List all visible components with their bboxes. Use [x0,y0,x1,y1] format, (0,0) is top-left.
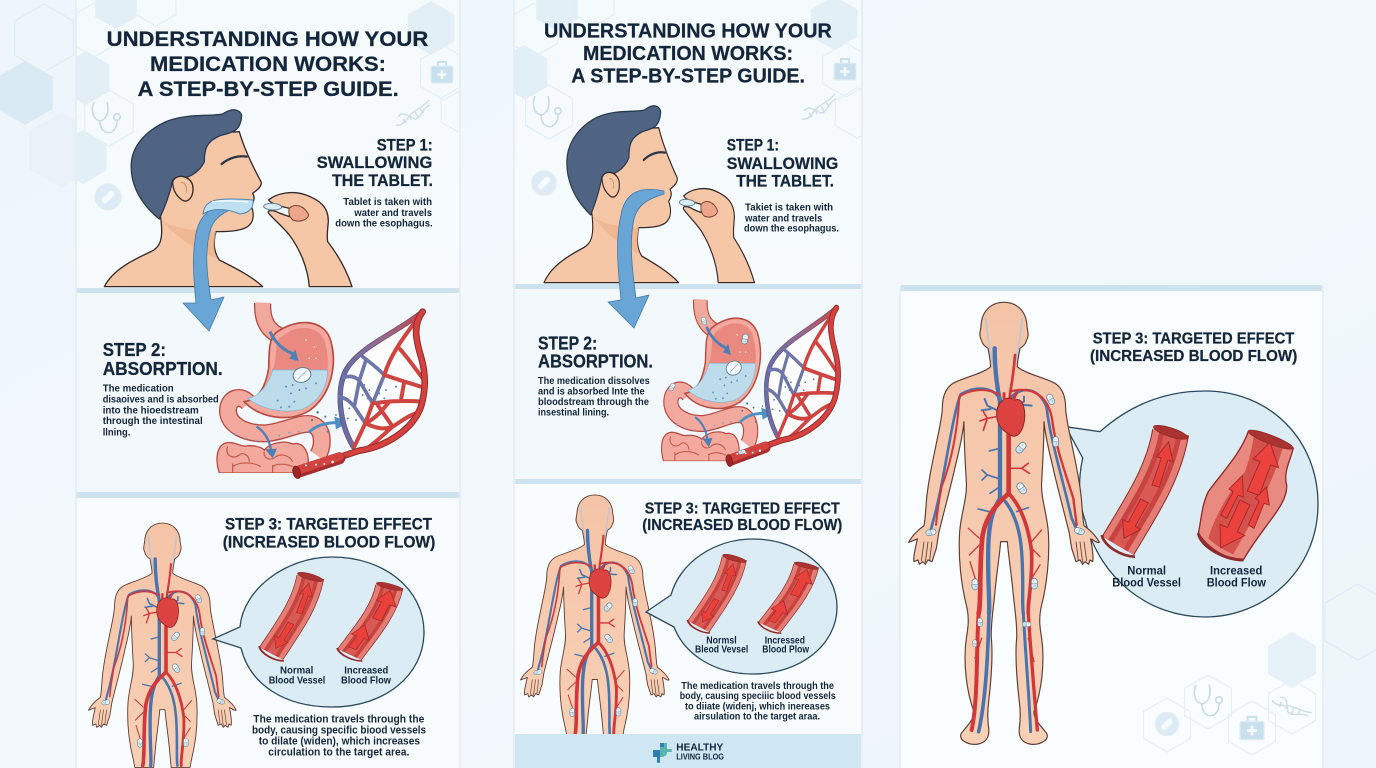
step two text: and is absorbed Inte the [538,385,645,397]
vessel labels: Normal [1127,563,1166,577]
step three text [252,713,426,759]
title: UNDERSTANDING HOW YOUR [544,20,832,42]
step one heading: THE TABLET. [332,171,433,190]
step two background [515,289,861,479]
step one text: down the esophagus. [744,223,839,235]
arrow: esophagus down to step two [608,189,664,328]
vessel labels [269,664,392,686]
illustration: body with blood vessels [520,495,669,737]
vessel labels: Normsl [706,634,737,646]
normal vessel [259,570,324,661]
vessel labels: Normal [280,664,313,676]
step three text: to dilate (widen), which increases [259,735,420,747]
logo text [676,742,724,761]
illustration: man taking tablet [104,110,352,287]
panel: version two infographic [501,0,879,768]
step three heading: (INCREASED BLOOD FLOW) [223,533,435,551]
step two heading [538,333,653,372]
step one text: Takiet is taken with [745,202,833,214]
vessel labels: Incressed [765,634,805,646]
step two text: The medication [103,383,174,395]
step one text: down the esophagus. [335,218,433,230]
step one text: water and travels [353,207,432,219]
title: MEDICATION WORKS: [583,43,793,65]
section band [515,284,861,289]
step two heading: STEP 2: [103,339,166,360]
step two heading: STEP 2: [538,333,597,353]
step three heading: STEP 3: TARGETED EFFECT [225,516,432,534]
step one text: water and travels [744,212,822,224]
vessel labels: Blood Flow [1207,576,1267,590]
step two text [103,383,219,438]
step one heading: STEP 1: [377,136,433,155]
step one heading: STEP 1: [727,136,779,155]
title: A STEP-BY-STEP GUIDE. [571,65,805,87]
title [107,28,428,101]
step three text: body, causing speciiic blood vessels [680,690,836,702]
section band [515,479,861,484]
vessel labels [1112,563,1267,590]
logo text: HEALTHY [676,742,723,754]
step one heading: SWALLOWING [317,153,432,172]
panel three hexagon pattern and medical icons [1144,632,1316,755]
step three text [680,680,836,722]
top band [901,285,1322,291]
vessel labels: Blood Flow [341,674,392,686]
step one heading [727,136,838,190]
step one heading: THE TABLET. [736,171,834,190]
callout: vessel comparison [213,557,424,707]
step one text: Tablet is taken with [343,196,432,208]
step one text [335,196,433,230]
step three heading [642,500,842,534]
vessel labels: Bleod Vevsel [695,644,748,656]
step three heading [1090,330,1297,365]
vessel labels: Blood Plow [762,644,810,656]
illustration: stomach and capillaries [217,303,425,479]
vessel labels: Increased [1210,563,1262,577]
vessel labels: Blood Vessel [1112,576,1181,590]
step three heading: STEP 3: TARGETED EFFECT [645,500,840,517]
illustration: man taking tablet [544,106,754,283]
step three heading: (INCREASED BLOOD FLOW) [1090,348,1297,365]
icon: medical cross [653,743,672,763]
panel: version one infographic [60,0,483,768]
step three text: The medication travels through the [253,713,424,725]
section band [77,492,459,498]
increased vessel [758,560,819,633]
step three background [515,484,861,734]
step three heading: (INCREASED BLOOD FLOW) [642,517,842,534]
title: A STEP-BY-STEP GUIDE. [138,78,399,101]
step three text: airsulation to the target araa. [694,710,820,722]
step two text: through the intestinal [103,415,203,427]
panel two hexagon pattern and medical icons [501,0,879,195]
normal vessel [1102,423,1189,557]
step two heading: ABSORPTION. [103,358,223,379]
illustration: body with blood vessels [909,302,1099,744]
step three text: The medication travels through the [681,680,834,692]
step three text: body, causing specific biood vessels [252,724,426,736]
step one heading [317,136,433,190]
arrow: esophagus down to step two [183,206,238,331]
step three background [77,498,459,768]
capsules in esophagus and stomach [668,317,749,455]
step three text: to diiate (widenj, which inereases [685,700,830,712]
title: UNDERSTANDING HOW YOUR [107,28,428,51]
callout: vessel comparison [646,539,837,674]
step two text: llning. [103,426,130,438]
logo text: LIVING BLOG [676,752,724,761]
step three text: circulation to the target area. [268,747,409,759]
step two text [538,375,650,419]
step one heading: SWALLOWING [727,154,838,173]
illustration: body with blood vessels [89,523,236,767]
logo [653,742,724,763]
panel: enlarged step three [899,285,1324,768]
panel one hexagon pattern and medical icons [60,0,483,764]
water in mouth [203,199,253,214]
normal vessel [687,553,747,633]
step three heading: STEP 3: TARGETED EFFECT [1093,330,1295,347]
increased vessel [337,581,403,661]
vessel labels: Blood Vessel [269,674,325,686]
step two text: bloodstream through the [538,396,649,408]
illustration: stomach and capillaries [662,299,838,467]
step two background [77,293,459,492]
title: MEDICATION WORKS: [150,53,386,76]
vessel labels [695,634,810,656]
step one text [744,202,839,235]
title [544,20,832,87]
step two text: disaoives and is absorbed [103,394,219,406]
step two text: insestinal lining. [538,407,609,419]
callout: vessel comparison [1066,391,1318,617]
vessel labels: Increased [344,664,388,676]
step two heading: ABSORPTION. [538,352,653,372]
step two text: The medication dissolves [538,375,650,387]
section band [77,288,459,293]
step three heading [223,516,435,551]
step two text: into the hioedstream [103,404,199,416]
increased vessel [1198,427,1295,560]
step two heading [103,339,223,379]
footer band [515,734,861,768]
